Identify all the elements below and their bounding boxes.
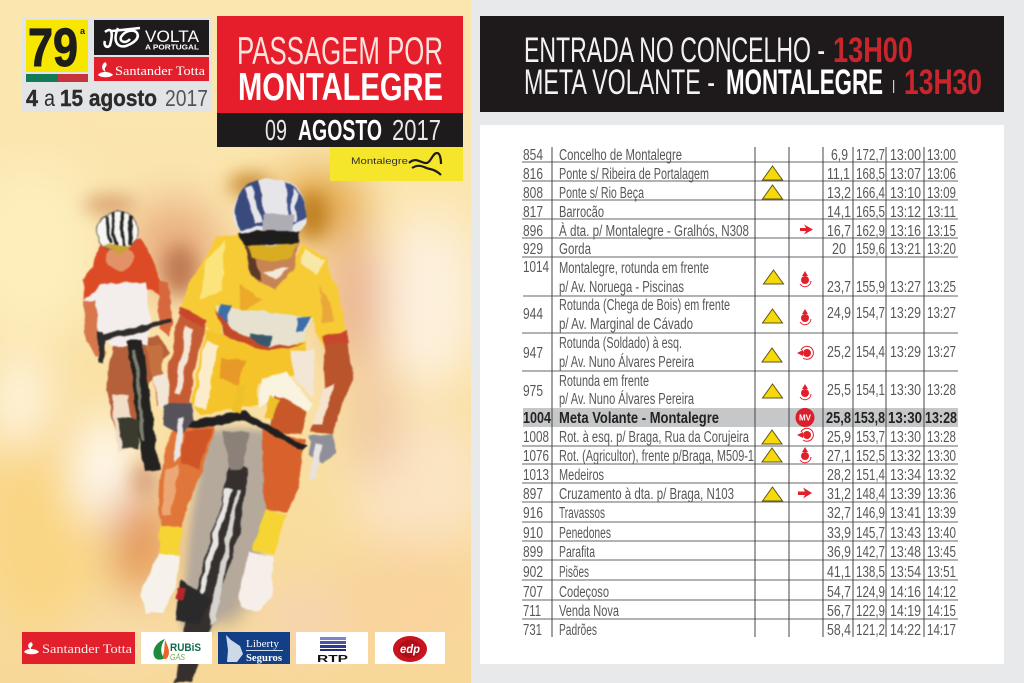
row 1008: 1008	[523, 429, 549, 446]
date bar	[217, 113, 463, 147]
row 944: Rotunda (Chega de Bois) em frente	[559, 297, 730, 314]
icon: right arrow, row 897	[798, 488, 812, 498]
header panel: entry and sprint times	[480, 16, 1004, 112]
row 1014: 23,7	[827, 279, 851, 296]
row 896	[523, 223, 956, 240]
row 902	[523, 564, 956, 581]
sponsor: Liberty Seguros	[218, 632, 290, 664]
row 910	[523, 525, 956, 542]
row 899: 13:48	[890, 544, 921, 561]
row 1004: highlighted sprint: 1004	[523, 410, 551, 427]
row 902: Pisões	[559, 564, 589, 581]
row 896: 162,9	[856, 223, 885, 240]
row 817	[523, 204, 956, 221]
row 1004: highlighted sprint: 13:28	[925, 410, 957, 427]
row 1076: 13:30	[927, 448, 956, 465]
sponsor: Liberty Seguros: Seguros	[246, 652, 283, 664]
date bar: 2017	[392, 115, 441, 147]
row 947: 947	[523, 345, 543, 362]
row 916	[523, 505, 956, 522]
row 944: 944	[523, 306, 543, 323]
small cyclist in red	[83, 211, 174, 472]
row 1008	[523, 429, 956, 446]
row 916: 146,9	[856, 505, 885, 522]
row 929: 159,6	[856, 241, 885, 258]
header panel: entry and sprint times: META VOLANTE -	[524, 63, 715, 102]
socks	[158, 525, 181, 556]
row 1014: 1014	[523, 259, 549, 276]
row 1013	[523, 467, 956, 484]
header panel: entry and sprint times: 13H00	[833, 31, 913, 70]
row 896: 13:15	[927, 223, 956, 240]
right arm	[310, 341, 353, 434]
row 896: 896	[523, 223, 543, 240]
row 1014: 13:27	[890, 279, 921, 296]
row 1014	[523, 259, 956, 296]
row 947: 25,2	[827, 344, 851, 361]
row 944: p/ Av. Marginal de Cávado	[559, 316, 693, 333]
row 854	[523, 147, 956, 164]
row 707: 707	[523, 584, 543, 601]
row 944: 24,9	[827, 305, 851, 322]
row 1004: highlighted sprint: 13:30	[888, 410, 922, 427]
row 817: 14,1	[827, 204, 851, 221]
event dates: 15 agosto	[60, 85, 157, 111]
row 1013: 28,2	[827, 467, 851, 484]
row 975: 975	[523, 383, 543, 400]
row 897: 31,2	[827, 486, 851, 503]
row 897: 897	[523, 486, 543, 503]
row 1004: highlighted sprint: Meta Volante - Montalegre	[559, 410, 719, 427]
row 1008: 153,7	[856, 429, 885, 446]
row 975: 13:28	[927, 382, 956, 399]
row 929: 13:20	[927, 241, 956, 258]
row 731: Padrões	[559, 622, 597, 639]
sponsor: Liberty Seguros: Liberty	[246, 638, 279, 650]
row 896: 16,7	[827, 223, 851, 240]
row 1013: Medeiros	[559, 467, 604, 484]
row 816: 816	[523, 166, 543, 183]
row 910: 910	[523, 525, 543, 542]
row 1014: 155,9	[856, 279, 885, 296]
row 711: 14:19	[890, 603, 921, 620]
icon: roundabout left, row 1008	[797, 428, 813, 441]
row 817: 13:12	[890, 204, 921, 221]
header panel: entry and sprint times: ENTRADA NO CONCELHO -	[524, 31, 825, 70]
row 910: 13:43	[890, 525, 921, 542]
logo: Volta a Portugal: A PORTUGAL	[145, 44, 200, 52]
row 902: 902	[523, 564, 543, 581]
badge: 79: a	[80, 26, 86, 36]
icon: MV sprint marker: MV	[799, 414, 812, 422]
row 1013: 151,4	[856, 467, 885, 484]
right glove	[308, 434, 336, 465]
row 707: 124,9	[856, 584, 885, 601]
row 944	[523, 297, 956, 333]
row 899	[523, 544, 956, 561]
knee pad	[258, 372, 313, 412]
row 899: 142,7	[856, 544, 885, 561]
row 1014: 13:25	[927, 279, 956, 296]
row 854: 854	[523, 147, 543, 164]
row 929: 929	[523, 241, 543, 258]
row 731: 58,4	[827, 622, 851, 639]
row 808: 166,4	[856, 185, 885, 202]
row 897	[523, 486, 956, 503]
row 947: Rotunda (Soldado) à esq.	[559, 335, 682, 352]
row 854: 172,7	[856, 147, 885, 164]
row 731	[523, 622, 956, 639]
row 929	[523, 241, 956, 258]
row 947: 13:29	[890, 344, 921, 361]
row 854: 13:00	[890, 147, 921, 164]
row 975: 13:30	[890, 382, 921, 399]
row 707: 14:12	[927, 584, 956, 601]
row 902: 13:54	[890, 564, 921, 581]
row 899: Parafita	[559, 544, 595, 561]
row 910: 33,9	[827, 525, 851, 542]
header panel: entry and sprint times: 13H30	[904, 63, 982, 102]
event dates: 4	[26, 85, 38, 111]
row 808: Ponte s/ Rio Beça	[559, 185, 644, 202]
icon: roundabout straight, row 975	[800, 384, 811, 400]
row 916: 13:39	[927, 505, 956, 522]
row 808: 13,2	[827, 185, 851, 202]
row 1008: 13:30	[890, 429, 921, 446]
row 975: 25,5	[827, 382, 851, 399]
sponsor: EDP	[375, 632, 445, 664]
row 1014: p/ Av. Noruega - Piscinas	[559, 279, 684, 296]
row 711: 122,9	[856, 603, 885, 620]
row 816	[523, 166, 956, 183]
date bar: AGOSTO	[298, 115, 382, 147]
row 711	[523, 603, 956, 620]
logo: Santander Totta	[94, 57, 209, 81]
helmet	[233, 179, 307, 245]
sponsor: EDP: edp	[400, 642, 420, 656]
row 899: 899	[523, 544, 543, 561]
row 916: 32,7	[827, 505, 851, 522]
header panel: entry and sprint times: MONTALEGRE	[726, 63, 883, 102]
row 1004: highlighted sprint	[523, 410, 957, 427]
title panel: Passagem por Montalegre: MONTALEGRE	[238, 66, 443, 109]
sponsor: Rubis Gas: RUBiS	[170, 642, 201, 654]
row 1013: 13:32	[927, 467, 956, 484]
row 711: 711	[523, 603, 541, 620]
event logo block	[22, 18, 212, 112]
row 808: 13:10	[890, 185, 921, 202]
sponsors row	[22, 632, 445, 665]
row 897: 13:39	[890, 486, 921, 503]
row 947: 154,4	[856, 344, 885, 361]
row 975	[523, 373, 956, 408]
row 817: Barrocão	[559, 204, 604, 221]
row 1076: 13:32	[890, 448, 921, 465]
row 944: 13:27	[927, 305, 956, 322]
row 910: Penedones	[559, 525, 611, 542]
row 929: Gorda	[559, 241, 591, 258]
sponsor: RTP	[296, 632, 368, 665]
row 808: 13:09	[927, 185, 956, 202]
row 1076: Rot. (Agricultor), frente p/Braga, M509-1	[559, 448, 754, 465]
left leg	[158, 418, 215, 528]
row 1076: 27,1	[827, 448, 851, 465]
row 910: 145,7	[856, 525, 885, 542]
row 897: 13:36	[927, 486, 956, 503]
row 707	[523, 584, 956, 601]
icon: roundabout straight, row 1076	[800, 447, 811, 463]
row 902: 41,1	[827, 564, 851, 581]
icon: right arrow, row 896	[800, 224, 813, 234]
icon: roundabout straight, row 1014	[800, 271, 811, 287]
large cyclist in yellow	[141, 179, 353, 683]
row 947: 13:27	[927, 344, 956, 361]
row 711: 14:15	[927, 603, 956, 620]
row 897: Cruzamento à dta. p/ Braga, N103	[559, 486, 734, 503]
sponsor: Rubis Gas: GÁS	[170, 653, 186, 662]
event dates: 2017	[165, 85, 208, 111]
row 896: À dta. p/ Montalegre - Gralhós, N308	[559, 223, 749, 240]
bike frame shadow	[180, 430, 280, 650]
shifters	[230, 406, 242, 414]
row 1013: 1013	[523, 467, 549, 484]
logo: Montalegre municipality	[330, 147, 463, 181]
row 1008: 25,9	[827, 429, 851, 446]
row 929: 20	[832, 241, 846, 258]
row 1004: highlighted sprint: 153,8	[854, 410, 885, 427]
logo: Volta a Portugal: VOLTA	[145, 27, 200, 46]
row 902: 13:51	[927, 564, 956, 581]
row 711: 56,7	[827, 603, 851, 620]
panel: route timetable	[480, 125, 1004, 664]
logo: Volta a Portugal	[94, 20, 209, 55]
row 808	[523, 185, 956, 202]
left glove	[164, 402, 195, 435]
row 731: 121,2	[856, 622, 885, 639]
row 816: 13:07	[890, 166, 921, 183]
sponsor: Santander Totta: Santander Totta	[42, 641, 132, 656]
row 1008: 13:28	[927, 429, 956, 446]
row 1014: Montalegre, rotunda em frente	[559, 260, 709, 277]
shoes	[141, 552, 180, 614]
row 902: 138,5	[856, 564, 885, 581]
row 944: 13:29	[890, 305, 921, 322]
row 816: 13:06	[927, 166, 956, 183]
row 975: Rotunda em frente	[559, 373, 649, 390]
row 854: 6,9	[831, 147, 848, 164]
sponsor: Rubis Gas	[141, 632, 212, 664]
row 854: Concelho de Montalegre	[559, 147, 682, 164]
row 854: 13:00	[927, 147, 956, 164]
row 975: p/ Av. Nuno Álvares Pereira	[559, 391, 694, 408]
row 947	[523, 335, 956, 371]
logo: Montalegre municipality: Montalegre	[351, 156, 408, 167]
handlebars	[166, 412, 307, 451]
row 731: 14:17	[927, 622, 956, 639]
row 817: 165,5	[856, 204, 885, 221]
jersey	[180, 233, 349, 352]
panel: illustration of two cyclists	[0, 0, 490, 683]
row 1008: Rot. à esq. p/ Braga, Rua da Corujeira	[559, 429, 749, 446]
row 929: 13:21	[890, 241, 921, 258]
row 1076: 152,5	[856, 448, 885, 465]
row 808: 808	[523, 185, 543, 202]
row 707: Codeçoso	[559, 584, 609, 601]
row 816: 11,1	[827, 166, 850, 183]
row 947: p/ Av. Nuno Álvares Pereira	[559, 354, 694, 371]
sponsor: Santander Totta	[22, 632, 135, 664]
logo: Santander Totta: Santander Totta	[115, 63, 205, 78]
row 1013: 13:34	[890, 467, 921, 484]
row 897: 148,4	[856, 486, 885, 503]
row 817: 817	[523, 204, 543, 221]
sponsor: RTP: RTP	[317, 654, 349, 665]
icons: warning triangles	[762, 166, 784, 501]
row 916: Travassos	[559, 505, 605, 522]
row 1004: highlighted sprint: 25,8	[826, 410, 851, 427]
row 910: 13:40	[927, 525, 956, 542]
icon: roundabout left, row 947	[797, 346, 813, 359]
row 975: 154,1	[856, 382, 885, 399]
highlighted row background	[523, 408, 958, 427]
right leg	[262, 430, 305, 513]
row 916: 13:41	[890, 505, 921, 522]
row 916: 916	[523, 505, 543, 522]
row 816: Ponte s/ Ribeira de Portalagem	[559, 166, 709, 183]
row 944: 154,7	[856, 305, 885, 322]
row 711: Venda Nova	[559, 603, 619, 620]
row 1076	[523, 448, 956, 465]
title panel: Passagem por Montalegre: PASSAGEM POR	[237, 30, 443, 73]
title panel: Passagem por Montalegre	[217, 16, 463, 113]
row 707: 54,7	[827, 584, 851, 601]
row 899: 13:45	[927, 544, 956, 561]
date bar: 09	[265, 115, 287, 147]
event dates: a	[44, 85, 55, 111]
left arm	[168, 310, 207, 412]
row 731: 14:22	[890, 622, 921, 639]
row 816: 168,5	[856, 166, 885, 183]
bike frame	[175, 462, 248, 683]
row 817: 13:11	[927, 204, 956, 221]
icon: MV sprint marker	[796, 408, 814, 427]
badge: 79: 79	[28, 18, 78, 78]
row 896: 13:16	[890, 223, 921, 240]
icon: roundabout straight, row 944	[800, 309, 811, 325]
row 707: 14:16	[890, 584, 921, 601]
row 899: 36,9	[827, 544, 851, 561]
row 731: 731	[523, 622, 542, 639]
shorts	[192, 330, 305, 416]
row 1076: 1076	[523, 448, 549, 465]
face	[254, 238, 300, 290]
event dates	[26, 85, 208, 111]
